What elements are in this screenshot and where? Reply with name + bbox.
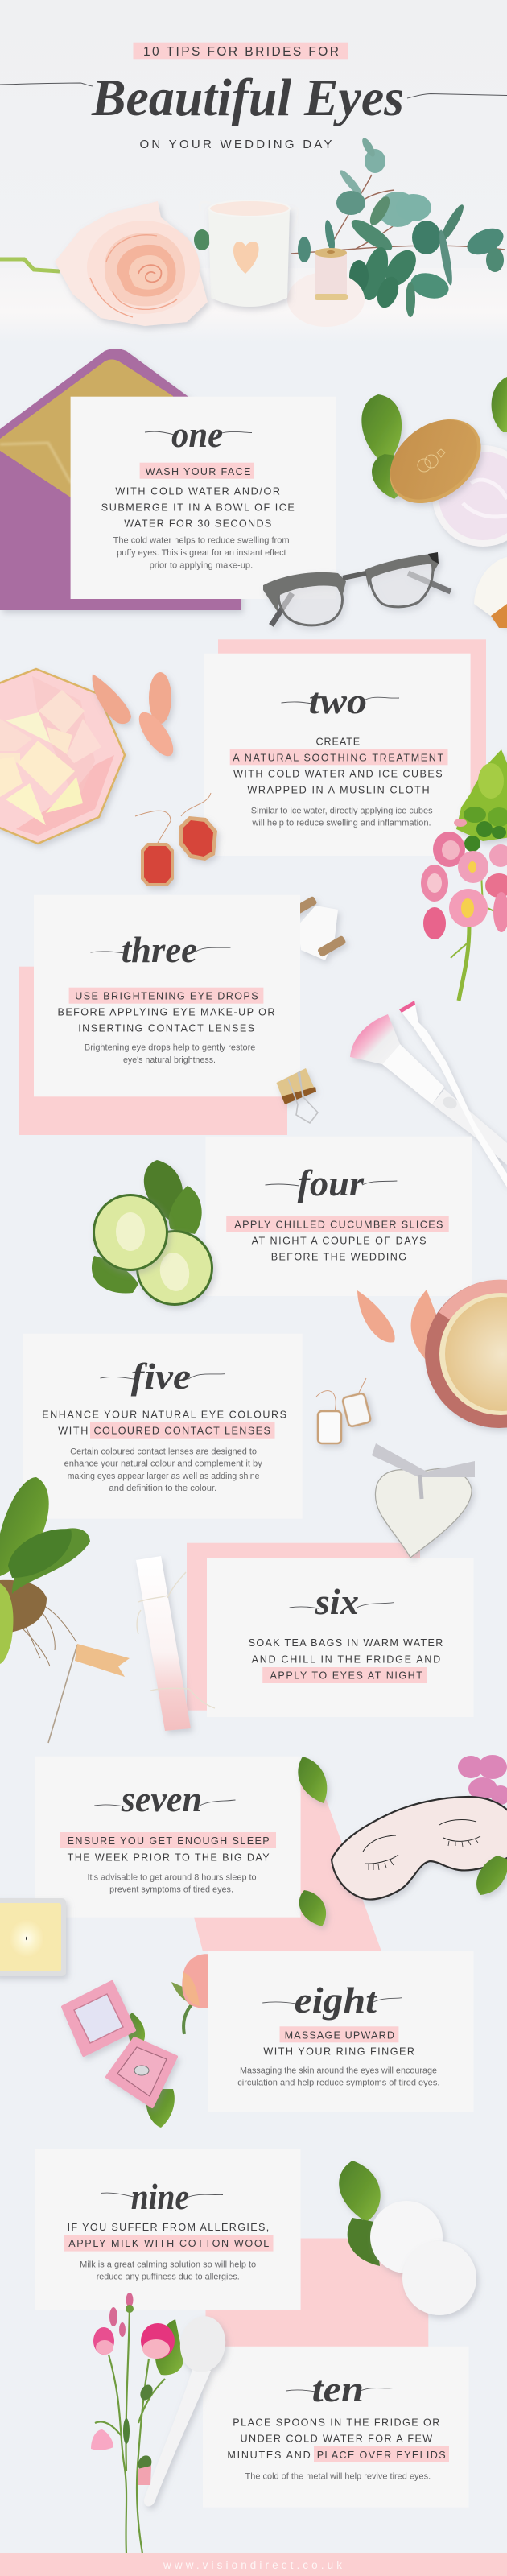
numeral: one [145, 414, 252, 455]
illustration: leaves and cotton pads [339, 2161, 476, 2315]
body text: It's advisable to get around 8 hours sleep to [87, 1872, 257, 1882]
body text [237, 2066, 439, 2088]
title script: Beautiful Eyes: Beautiful Eyes [91, 68, 404, 127]
heading text: WITH [58, 1425, 88, 1436]
illustration: octagonal plate with ice cubes [0, 669, 125, 844]
illustration: green leaf on mask [476, 1856, 507, 1895]
illustration: petals near coffee [357, 1290, 439, 1368]
numeral: eight: eight [295, 1979, 377, 2021]
numeral: ten [286, 2368, 394, 2409]
illustration: white spool [288, 896, 347, 960]
body text: and definition to the colour. [109, 1484, 216, 1493]
pink panel between tips nine and ten [206, 2238, 428, 2347]
illustration: rolled scroll with twine [136, 1556, 215, 1731]
panel: tip two [204, 654, 471, 856]
numeral: six: six [315, 1581, 359, 1622]
card ten [203, 2347, 469, 2508]
illustration: green bud and pink flower stem [421, 749, 507, 1001]
body text: prevent symptoms of tired eyes. [109, 1885, 233, 1894]
heading text: WITH COLD WATER AND ICE CUBES [233, 769, 443, 780]
heading text: APPLY TO EYES AT NIGHT [270, 1670, 422, 1681]
numeral: five [100, 1356, 225, 1397]
numeral: two [282, 680, 399, 721]
pink panel behind tip two [218, 639, 486, 837]
body text [84, 1043, 255, 1065]
illustration: green leaves on tip seven [298, 1757, 327, 1926]
card three [34, 895, 300, 1096]
card six [207, 1558, 474, 1717]
body text [113, 536, 290, 570]
body text: circulation and help reduce symptoms of tired eyes. [237, 2079, 439, 2088]
panel: tip three [34, 895, 300, 1096]
highlight [230, 749, 447, 765]
heading text [101, 466, 295, 529]
heading text: MINUTES AND [227, 2450, 311, 2461]
highlight [90, 1422, 275, 1439]
illustration: plant with leaves and roots [0, 1477, 90, 1666]
header backdrop [0, 0, 507, 342]
heading text [42, 1409, 286, 1436]
body text [80, 2260, 256, 2282]
body text: prior to applying make-up. [150, 560, 253, 570]
heading text [234, 1219, 443, 1263]
numeral: three: three [122, 929, 197, 970]
numeral: three [90, 929, 230, 970]
heading text [263, 2030, 414, 2058]
body text: enhance your natural colour and complement it by [64, 1459, 262, 1469]
body text [251, 806, 433, 828]
illustration: white spoon [144, 2313, 229, 2506]
pink panel behind tip six [187, 1543, 420, 1711]
heading text [58, 990, 275, 1034]
pink panel behind tip three [19, 967, 287, 1135]
illustration: wooden heart with gingham ribbon [372, 1443, 475, 1558]
body text: The cold water helps to reduce swelling from [113, 536, 290, 546]
body text: Similar to ice water, directly applying ice cubes [251, 806, 433, 815]
heading text: INSERTING CONTACT LENSES [78, 1023, 254, 1034]
heading text: WITH YOUR RING FINGER [263, 2046, 414, 2058]
illustration: silk ribbon [287, 272, 365, 327]
pink panel between tips seven and eight [181, 1771, 381, 1951]
highlight [314, 2446, 449, 2462]
heading text: COLOURED CONTACT LENSES [93, 1425, 270, 1436]
heading text: UNDER COLD WATER FOR A FEW [240, 2434, 432, 2445]
body text: making eyes appear larger as well as adding shine [68, 1472, 260, 1481]
footer url: www.visiondirect.co.uk [163, 2559, 342, 2571]
body text: The cold of the metal will help revive tired eyes. [245, 2472, 431, 2482]
numeral: nine [101, 2176, 223, 2217]
body text [64, 1447, 262, 1493]
title script: Beautiful Eyes [0, 68, 507, 127]
illustration: make-up brush fan [474, 557, 507, 628]
heading text: THE WEEK PRIOR TO THE BIG DAY [68, 1852, 270, 1864]
heading text: AND CHILL IN THE FRIDGE AND [252, 1653, 440, 1665]
card four [206, 1137, 472, 1296]
illustration: leaf behind spoon [155, 2319, 183, 2375]
heading text: PLACE SPOONS IN THE FRIDGE OR [233, 2417, 439, 2429]
highlight [64, 2235, 274, 2252]
heading text: IF YOU SUFFER FROM ALLERGIES, [68, 2222, 269, 2233]
panel: tip six [207, 1558, 474, 1717]
title [0, 43, 507, 151]
highlight [69, 988, 263, 1004]
numeral: seven [94, 1778, 235, 1819]
illustration: pink rose bud [171, 1954, 233, 2034]
heading text: APPLY CHILLED CUCUMBER SLICES [234, 1219, 443, 1230]
highlight [262, 1667, 427, 1683]
numeral: two: two [309, 680, 367, 721]
illustration: flag [48, 1644, 130, 1743]
highlight [280, 2026, 398, 2042]
highlight [226, 1216, 449, 1232]
heading text [227, 2417, 446, 2461]
illustration: make-up brushes [350, 1001, 507, 1187]
card nine [35, 2149, 301, 2310]
illustration: pink ring boxes [63, 1982, 176, 2128]
heading text [68, 2222, 269, 2249]
panel backing: envelope [0, 349, 241, 610]
numeral: ten: ten [312, 2368, 364, 2409]
heading text: ENHANCE YOUR NATURAL EYE COLOURS [42, 1409, 286, 1420]
numeral: seven: seven [121, 1778, 202, 1819]
numeral: eight [262, 1979, 402, 2021]
card five [23, 1334, 303, 1519]
heading text: SUBMERGE IT IN A BOWL OF ICE [101, 502, 295, 513]
heading text: A NATURAL SOOTHING TREATMENT [233, 753, 443, 764]
numeral: one: one [171, 414, 223, 455]
body text: Milk is a great calming solution so will help to [80, 2260, 256, 2270]
illustration: sleep mask [332, 1797, 507, 1900]
illustration: rose with stem [0, 201, 208, 326]
card two [204, 654, 471, 856]
illustration: eucalyptus [194, 136, 507, 317]
illustration: coffee bowl [425, 1280, 507, 1428]
illustration: thread spool [315, 248, 348, 300]
card seven [35, 1757, 301, 1918]
heading text: WASH YOUR FACE [146, 466, 250, 477]
heading text [249, 1637, 443, 1681]
body text: reduce any puffiness due to allergies. [97, 2273, 240, 2282]
title tag: 10 tips: 10 TIPS FOR BRIDES FOR [143, 45, 339, 59]
panel: tip ten [203, 2347, 469, 2508]
numeral: four: four [298, 1162, 365, 1203]
illustration: cucumber slices and leaves [92, 1160, 213, 1306]
heading text: WRAPPED IN A MUSLIN CLOTH [247, 785, 430, 796]
illustration: leaves by cream jar [361, 377, 507, 499]
numeral: five: five [131, 1356, 191, 1397]
heading text: BEFORE THE WEDDING [271, 1252, 406, 1263]
panel: tip one [71, 397, 336, 599]
illustration: gold jar lid [373, 402, 497, 520]
heading text [233, 736, 443, 796]
highlight [140, 463, 254, 479]
body text: Massaging the skin around the eyes will encourage [240, 2066, 437, 2076]
illustration: binder clip [277, 1068, 318, 1123]
numeral: six [290, 1581, 394, 1622]
heading text: AT NIGHT A COUPLE OF DAYS [252, 1236, 427, 1247]
body text [87, 1872, 257, 1894]
footer bar [0, 2553, 507, 2576]
heading text: SOAK TEA BAGS IN WARM WATER [249, 1637, 443, 1649]
heading text: MASSAGE UPWARD [285, 2030, 394, 2041]
illustration: glasses [263, 552, 451, 625]
numeral: four [266, 1162, 397, 1203]
heading text: USE BRIGHTENING EYE DROPS [75, 990, 258, 1001]
panel: tip eight [208, 1951, 474, 2112]
illustration: red earrings [135, 793, 217, 886]
illustration: candle [0, 1898, 66, 1976]
body text: puffy eyes. This is great for an instant effect [117, 548, 286, 558]
title subtitle: ON YOUR WEDDING DAY [140, 138, 332, 151]
illustration: pink roses on stems [91, 2293, 175, 2553]
heading text: CREATE [315, 736, 360, 747]
numeral: nine: nine [131, 2176, 189, 2217]
heading text: WATER FOR 30 SECONDS [124, 518, 271, 529]
heading text: APPLY MILK WITH COTTON WOOL [68, 2238, 269, 2249]
heading text [68, 1835, 270, 1864]
panel: tip five [23, 1334, 303, 1519]
body text: will help to reduce swelling and inflammation. [251, 818, 431, 828]
panel: tip four [206, 1137, 472, 1296]
illustration: petals [93, 672, 179, 762]
heading text: ENSURE YOU GET ENOUGH SLEEP [68, 1835, 270, 1847]
body text: Brightening eye drops help to gently restore [84, 1043, 255, 1053]
card eight [208, 1951, 474, 2112]
illustration: pink orchids [458, 1755, 507, 1805]
panel: tip seven [35, 1757, 301, 1918]
panel: tip nine [35, 2149, 301, 2310]
heading text: WITH COLD WATER AND/OR [115, 485, 280, 497]
illustration: candle pot with heart [200, 200, 298, 307]
heading text: BEFORE APPLYING EYE MAKE-UP OR [58, 1007, 275, 1018]
body text: eye's natural brightness. [123, 1055, 216, 1065]
heading text: PLACE OVER EYELIDS [317, 2450, 446, 2461]
body text: Certain coloured contact lenses are designed to [70, 1447, 257, 1457]
card one [71, 397, 336, 599]
illustration: cream jar [432, 445, 507, 547]
illustration: white earrings [316, 1378, 371, 1443]
highlight [60, 1832, 276, 1848]
